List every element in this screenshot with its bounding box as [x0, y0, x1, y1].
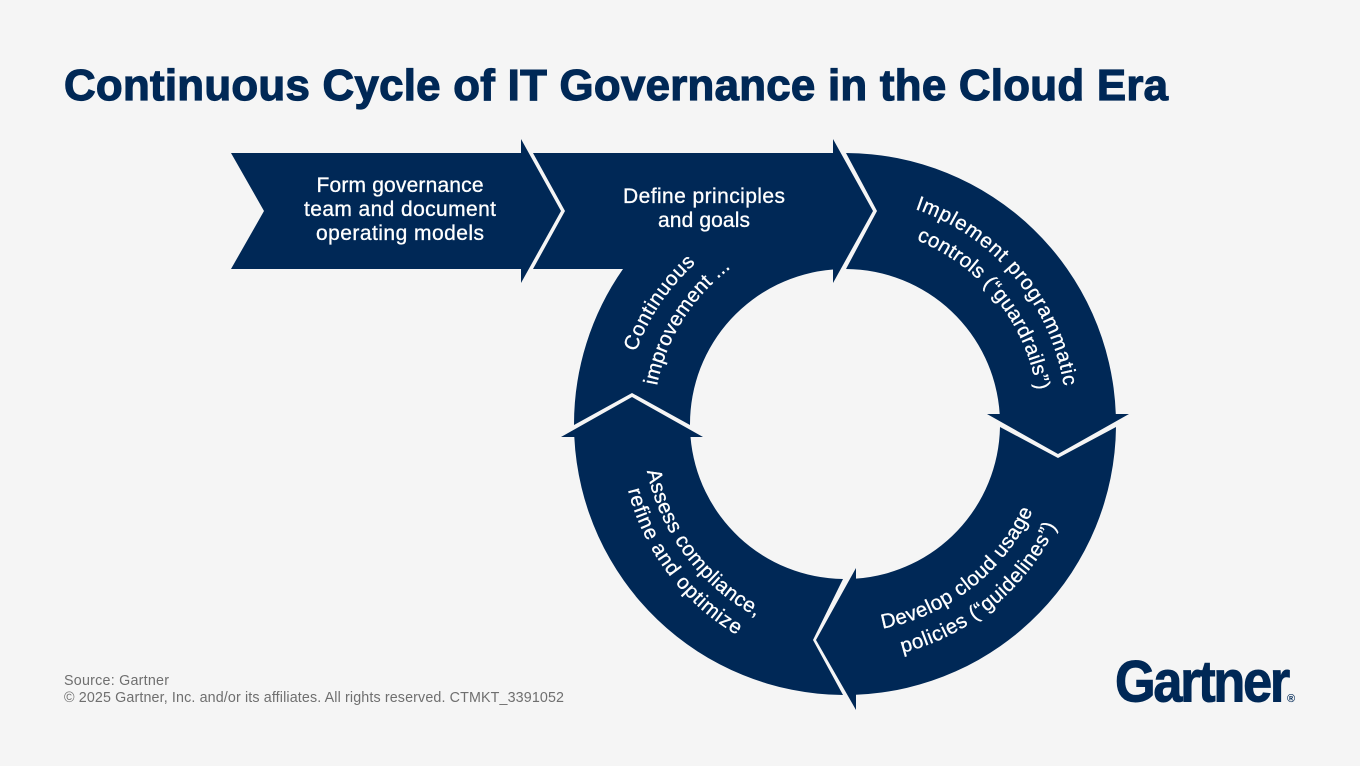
source and copyright note: © 2025 Gartner, Inc. and/or its affiliates. All rights reserved. CTMKT_3391052: [64, 690, 564, 706]
title: Continuous Cycle of IT Governance in the Cloud Era: [64, 61, 1169, 110]
arrow: form governance team: [231, 139, 561, 283]
source and copyright note: Source: Gartner: [64, 673, 169, 689]
arrow: define principles and continuous improvement: [533, 139, 873, 425]
arrow: assess compliance, refine and optimize: Assess compliance,: [646, 470, 756, 618]
Gartner logo: Gartner: [1115, 650, 1290, 714]
arrow: define principles and continuous improvement: Continuous: [624, 257, 694, 350]
arrow: assess compliance, refine and optimize: refine and optimize: [628, 488, 740, 634]
arrow: develop cloud usage policies: [816, 427, 1116, 710]
arrow: implement programmatic controls: Implement programmatic: [916, 196, 1076, 386]
arrow: form governance team: operating models: [316, 222, 484, 245]
arrow: develop cloud usage policies: Develop cloud usage: [881, 508, 1032, 628]
arrow: form governance team: team and document: [304, 198, 496, 221]
arrow: define principles and continuous improvement: improvement ...: [642, 267, 730, 385]
arrow: define principles and continuous improvement: Define principles: [623, 185, 785, 208]
arrow: implement programmatic controls: controls (“guardrails”): [918, 231, 1050, 388]
arrow: develop cloud usage policies: policies (“guidelines”): [900, 523, 1058, 657]
arrow: define principles and continuous improvement: and goals: [658, 209, 750, 232]
source and copyright note: [64, 673, 564, 706]
arrow: form governance team: Form governance: [316, 174, 484, 197]
arrow: implement programmatic controls: [846, 153, 1129, 454]
Gartner logo: ®: [1287, 693, 1295, 705]
arrow: assess compliance, refine and optimize: [561, 397, 843, 695]
